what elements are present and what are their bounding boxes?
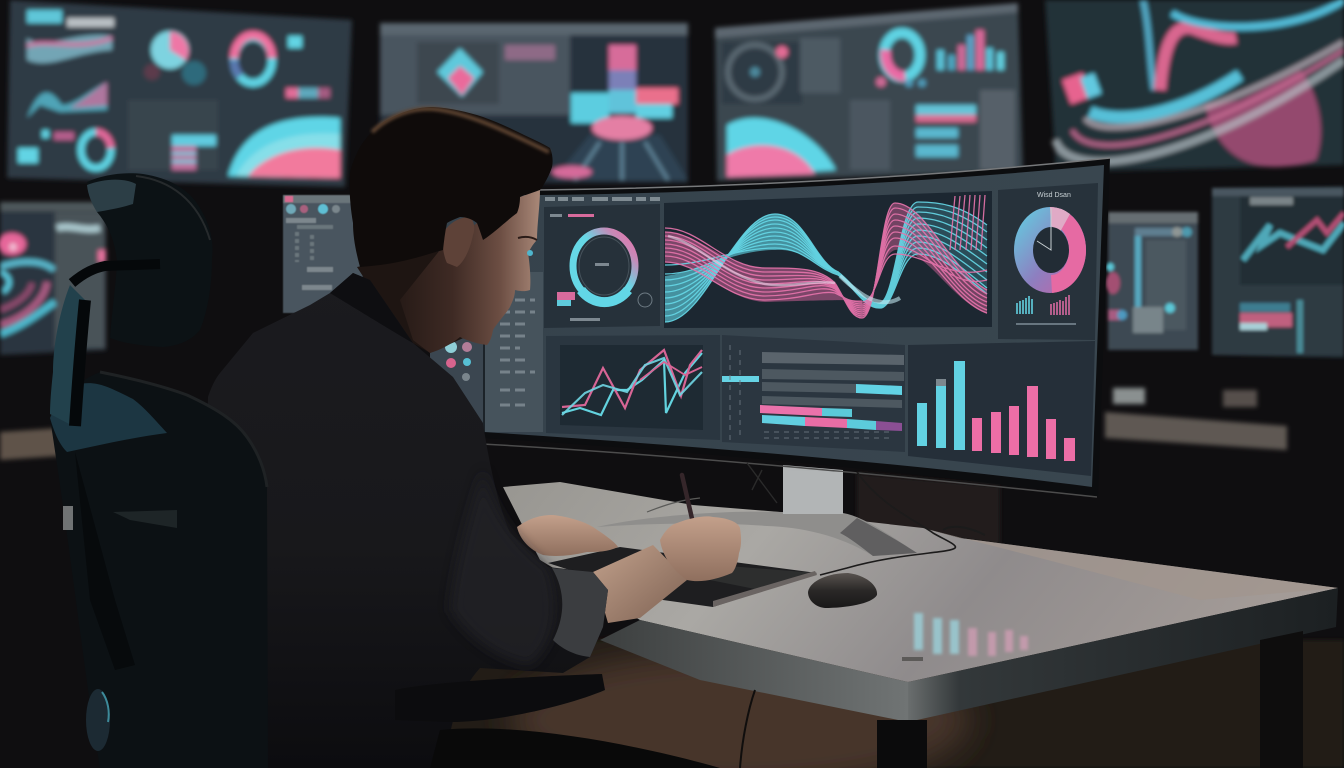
under-desk warm glow	[510, 650, 970, 768]
panel with small circles	[430, 335, 485, 432]
list panel at left edge	[485, 272, 543, 432]
ribbon fills	[665, 202, 987, 322]
far hand	[517, 515, 618, 556]
desk left front edge	[600, 620, 908, 722]
computer mouse	[808, 573, 877, 608]
panel: donut	[998, 183, 1098, 340]
pen	[682, 475, 693, 523]
face	[400, 190, 540, 353]
desk right front edge	[908, 588, 1338, 722]
pink ribbon	[665, 195, 987, 318]
chair base	[86, 689, 110, 751]
panel: bar chart	[908, 341, 1095, 476]
trousers	[430, 728, 720, 768]
near hand	[660, 516, 741, 581]
background desks	[0, 388, 1344, 768]
chair headrest	[87, 173, 212, 347]
near forearm	[593, 545, 687, 623]
drawing tablet	[548, 547, 817, 607]
desk legs	[877, 720, 927, 768]
screen reflection on desk	[914, 613, 1028, 656]
toolbar	[545, 197, 660, 201]
hair	[350, 107, 553, 267]
donut caption: Wisd Dsan	[1037, 192, 1071, 199]
ear	[443, 217, 474, 267]
neck	[357, 250, 470, 353]
monitor bezel	[430, 158, 1110, 497]
monitor screen	[430, 165, 1104, 487]
background monitor: far right	[1045, 0, 1344, 172]
lighter rear band of desk	[923, 528, 1338, 600]
man	[207, 107, 741, 768]
panel: table and stacked bars	[722, 335, 905, 452]
desk	[503, 463, 1338, 768]
shirt collar	[330, 273, 413, 343]
shirt sleeve cuff	[552, 568, 608, 657]
eye and brow	[518, 237, 537, 240]
chair side clip	[63, 506, 73, 530]
chair teal lumbar band	[50, 383, 167, 452]
background monitor: behind head	[283, 195, 363, 313]
background monitors: right	[1106, 186, 1344, 358]
panel: wave chart	[664, 191, 992, 328]
chair upright	[50, 285, 85, 426]
desk label mark	[902, 657, 923, 661]
cable under desk	[740, 690, 755, 768]
background monitor: top right	[715, 3, 1023, 181]
shirt arm highlight	[450, 470, 555, 665]
desk surface	[503, 482, 1338, 682]
main monitor	[430, 158, 1110, 514]
monitor base	[597, 512, 917, 556]
panel: ring gauge	[544, 204, 660, 328]
shirt	[207, 273, 608, 768]
background monitor: middle left	[0, 202, 106, 355]
background monitor: top left	[7, 0, 352, 187]
panel: line chart	[546, 335, 720, 440]
hair highlight	[372, 109, 549, 152]
chair	[50, 173, 605, 768]
chair frame	[72, 264, 160, 283]
monitor stand front	[783, 470, 843, 514]
chair back	[50, 372, 268, 768]
cyan ribbon	[665, 202, 987, 322]
chair headrest lip	[87, 180, 136, 212]
chair mesh panel	[113, 510, 177, 528]
monitor stand	[783, 465, 843, 514]
chair armrest	[395, 674, 605, 722]
background monitor: top centre	[380, 23, 688, 183]
chair strap	[75, 452, 135, 670]
cables	[820, 472, 955, 575]
